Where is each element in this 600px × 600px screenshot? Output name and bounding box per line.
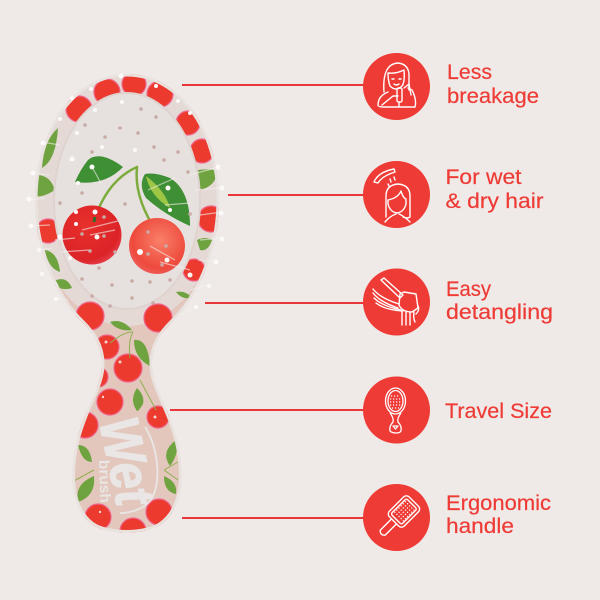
connector lines (170, 85, 364, 518)
cherry leaves (75, 156, 190, 226)
icon: paddle brush (363, 484, 430, 551)
label (446, 278, 553, 324)
bristles (26, 142, 222, 315)
label: & dry hair (446, 190, 544, 213)
feature: For wet & dry hair (363, 161, 544, 228)
label: Ergonomic (446, 492, 551, 515)
label (447, 61, 539, 108)
label: detangling (446, 301, 553, 324)
label: Travel Size (445, 400, 552, 423)
label: handle (446, 515, 514, 538)
icon: woman brushing hair (363, 53, 430, 120)
icon: hand detangling hair (363, 268, 430, 336)
feature: Ergonomic handle (363, 484, 551, 551)
logo: Wet brush: brush (95, 460, 113, 503)
icon: small brush (363, 376, 430, 444)
feature: Easy detangling (363, 268, 553, 336)
label: Less (447, 61, 492, 84)
brush body (35, 74, 219, 532)
feature: Travel Size (363, 376, 552, 444)
label: Easy (446, 278, 491, 301)
large cherries (62, 206, 185, 274)
label (446, 166, 544, 213)
label: breakage (447, 85, 539, 108)
cherry stems (95, 167, 153, 226)
brush illustration (26, 72, 224, 544)
label: For wet (446, 166, 522, 189)
feature: Less breakage (363, 53, 539, 120)
logo: Wet brush: Wet (87, 411, 168, 513)
label (446, 492, 551, 538)
head and handle cherry pattern (35, 72, 224, 544)
inner bristle pad (54, 93, 200, 309)
icon: shower and hair (363, 161, 430, 228)
